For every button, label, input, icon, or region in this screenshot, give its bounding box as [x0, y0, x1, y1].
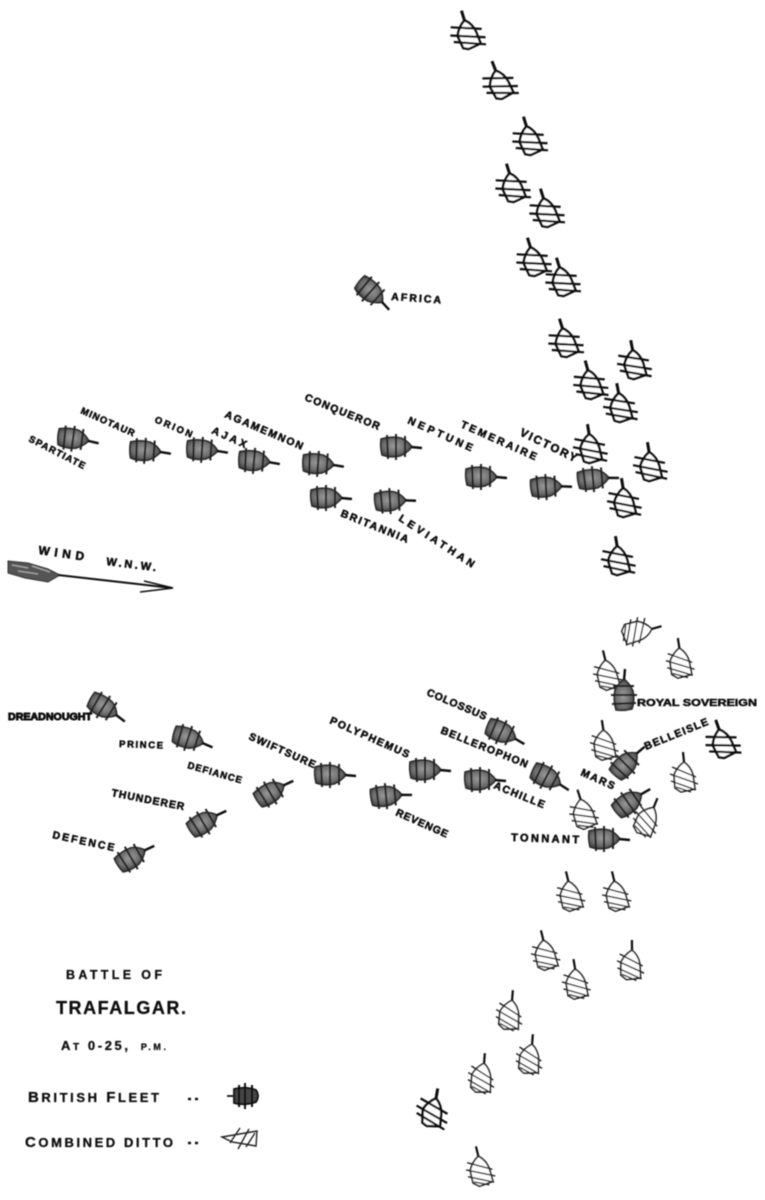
ship labels: lee column: DREADNOUGHT: [8, 712, 92, 723]
british fleet: weather column: [56, 272, 620, 515]
title: battle of: BATTLE OF: [66, 968, 162, 982]
ship labels: lee column: PRINCE: [119, 739, 163, 752]
legend: combined fleet: [25, 1128, 257, 1151]
ship labels: weather column: [27, 291, 579, 570]
ship labels: weather column: AFRICA: [391, 291, 442, 307]
ship labels: lee column: ACHILLE: [492, 780, 546, 811]
ship labels: weather column: MINOTAUR: [79, 406, 136, 439]
british fleet: lee column: [83, 669, 657, 877]
ship labels: lee column: DEFENCE: [51, 829, 115, 854]
ship labels: lee column: MARS: [579, 767, 617, 792]
label: wind: WIND: [38, 543, 85, 563]
ship labels: lee column: REVENGE: [394, 807, 450, 841]
ship labels: lee column: TONNANT: [511, 832, 580, 846]
ship labels: weather column: AJAX: [210, 425, 248, 451]
combined fleet: northern column: [446, 7, 668, 576]
ship labels: lee column: BELLEISLE: [643, 716, 710, 753]
legend: combined fleet: COMBINED DITTO: [25, 1134, 173, 1151]
legend: british fleet: [28, 1083, 258, 1109]
ship labels: weather column: VICTORY: [518, 427, 579, 465]
ship labels: weather column: SPARTIATE: [27, 434, 87, 472]
combined fleet: southern column: [412, 613, 743, 1188]
title: trafalgar: TRAFALGAR.: [56, 998, 186, 1018]
label: wind bearing: W.N.W.: [106, 556, 157, 574]
ship labels: lee column: THUNDERER: [110, 787, 186, 813]
ship labels: lee column: COLOSSUS: [425, 687, 488, 723]
ship labels: lee column: ROYAL SOVEREIGN: [637, 697, 757, 709]
ship labels: weather column: NEPTUNE: [406, 415, 475, 454]
legend: british fleet: BRITISH FLEET: [28, 1089, 159, 1106]
arrow: wind direction: [8, 561, 173, 592]
ship labels: lee column: [8, 687, 757, 854]
ship labels: weather column: BRITANNIA: [339, 508, 411, 546]
ship labels: weather column: AGAMEMNON: [223, 409, 305, 453]
ship labels: lee column: BELLEROPHON: [439, 725, 530, 771]
ship labels: lee column: POLYPHEMUS: [328, 715, 411, 761]
ship labels: weather column: TEMERAIRE: [459, 419, 539, 463]
ship labels: weather column: CONQUEROR: [303, 392, 382, 433]
ship labels: weather column: LEVIATHAN: [396, 512, 477, 570]
ship labels: lee column: DEFIANCE: [186, 760, 243, 786]
ship labels: weather column: ORION: [153, 415, 194, 440]
ship labels: lee column: SWIFTSURE: [247, 731, 317, 771]
subtitle: time: A T 0-25, P.M.: [61, 1038, 166, 1053]
